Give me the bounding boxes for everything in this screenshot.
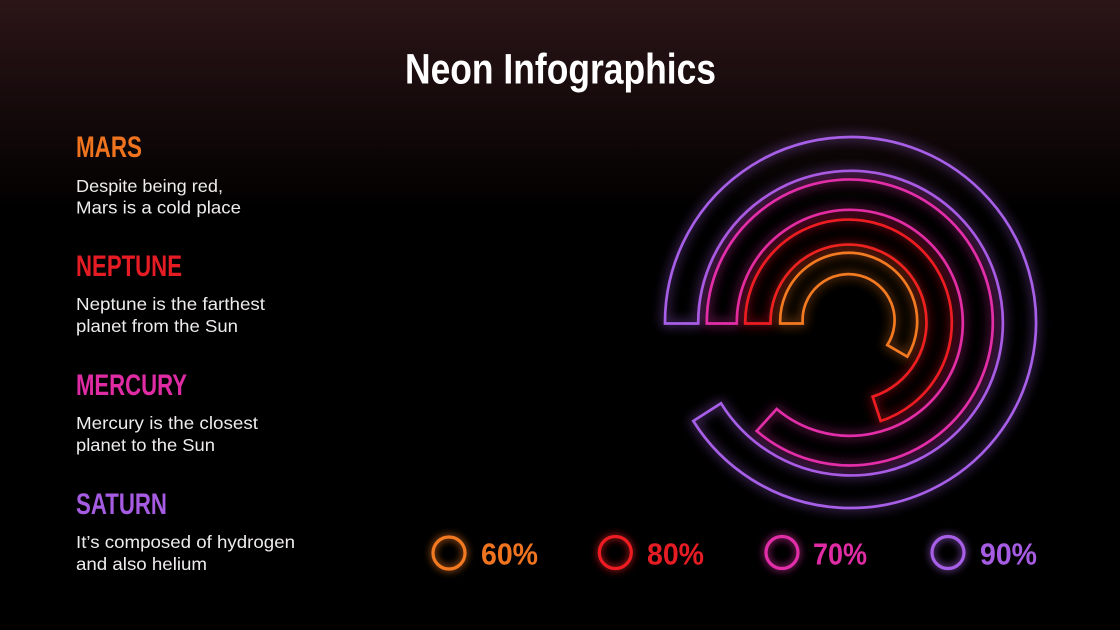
text block: Neptune: Neptune is the farthest bbox=[76, 294, 265, 314]
ring: Mercury 70% bbox=[707, 179, 993, 465]
text block: Mercury: planet to the Sun bbox=[76, 435, 215, 455]
ring: Mars 60% bbox=[780, 253, 917, 357]
text block: Neptune: NEPTUNE bbox=[76, 250, 182, 283]
legend item: 90% bbox=[932, 536, 1037, 572]
legend item: 70% bbox=[766, 536, 867, 572]
text block: Neptune: planet from the Sun bbox=[76, 316, 238, 336]
ring: Saturn 90% bbox=[665, 137, 1036, 508]
legend item: 60% bbox=[433, 536, 538, 572]
legend item: 70%: 70% bbox=[813, 536, 867, 572]
text block: Saturn: It’s composed of hydrogen bbox=[76, 532, 295, 552]
text block: Saturn: and also helium bbox=[76, 554, 207, 574]
text block: Neptune bbox=[76, 250, 265, 336]
text block: Saturn bbox=[76, 488, 295, 574]
legend item: 90%: 90% bbox=[980, 536, 1037, 572]
legend item: 60%: 60% bbox=[481, 536, 538, 572]
text block: Mars: Despite being red, bbox=[76, 176, 223, 196]
text block: Mercury bbox=[76, 369, 258, 455]
text block: Mars bbox=[76, 131, 241, 218]
text block: Mercury: MERCURY bbox=[76, 369, 187, 402]
text block: Mars: Mars is a cold place bbox=[76, 198, 241, 218]
chart: neon radial bars bbox=[665, 137, 1036, 508]
legend item: 80% bbox=[599, 536, 704, 572]
text block: Saturn: SATURN bbox=[76, 488, 167, 521]
text block: Mars: MARS bbox=[76, 131, 142, 164]
legend bbox=[433, 536, 1037, 572]
text block: Mercury: Mercury is the closest bbox=[76, 413, 258, 433]
panel: planet descriptions bbox=[76, 131, 295, 574]
title: Neon Infographics bbox=[405, 46, 716, 94]
legend item: 80%: 80% bbox=[647, 536, 704, 572]
ring: Neptune 80% bbox=[745, 220, 952, 421]
